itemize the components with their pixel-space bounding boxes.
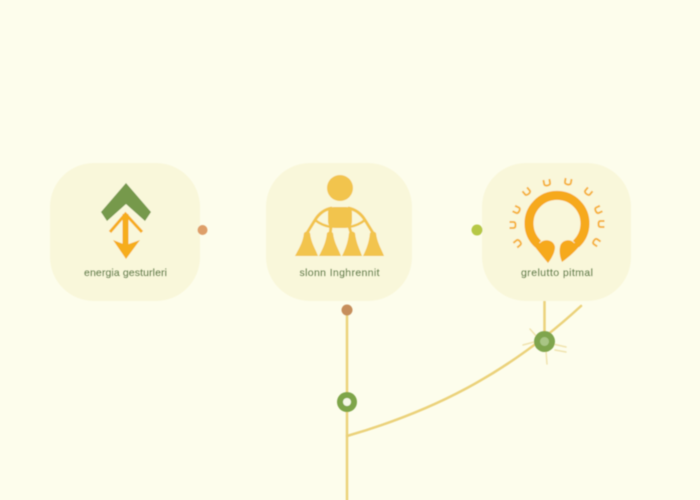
icon: green chevron and orange arrow: [101, 183, 151, 259]
label: energia gesturleri: [84, 267, 167, 279]
node: green ring: [337, 392, 357, 412]
dot: orange right of first panel: [198, 225, 208, 235]
icon: sun ring with rays: [510, 178, 604, 263]
label: grelutto pitmal: [521, 267, 593, 279]
connector lines: [347, 300, 581, 500]
panel: slonn Inghrennit: [266, 163, 412, 301]
card background: [50, 163, 200, 301]
card background: [266, 163, 412, 301]
panel: grelutto pitmal: [482, 163, 631, 301]
icon: person hierarchy: [295, 175, 384, 256]
panel: energia gesturleri: [50, 163, 200, 301]
node: green burst: [523, 329, 566, 364]
dot: brown under second panel: [342, 304, 352, 316]
dot: lime left of third panel: [472, 224, 482, 236]
card background: [482, 163, 631, 301]
artwork: [50, 163, 631, 500]
label: slonn Inghrennit: [300, 267, 380, 279]
